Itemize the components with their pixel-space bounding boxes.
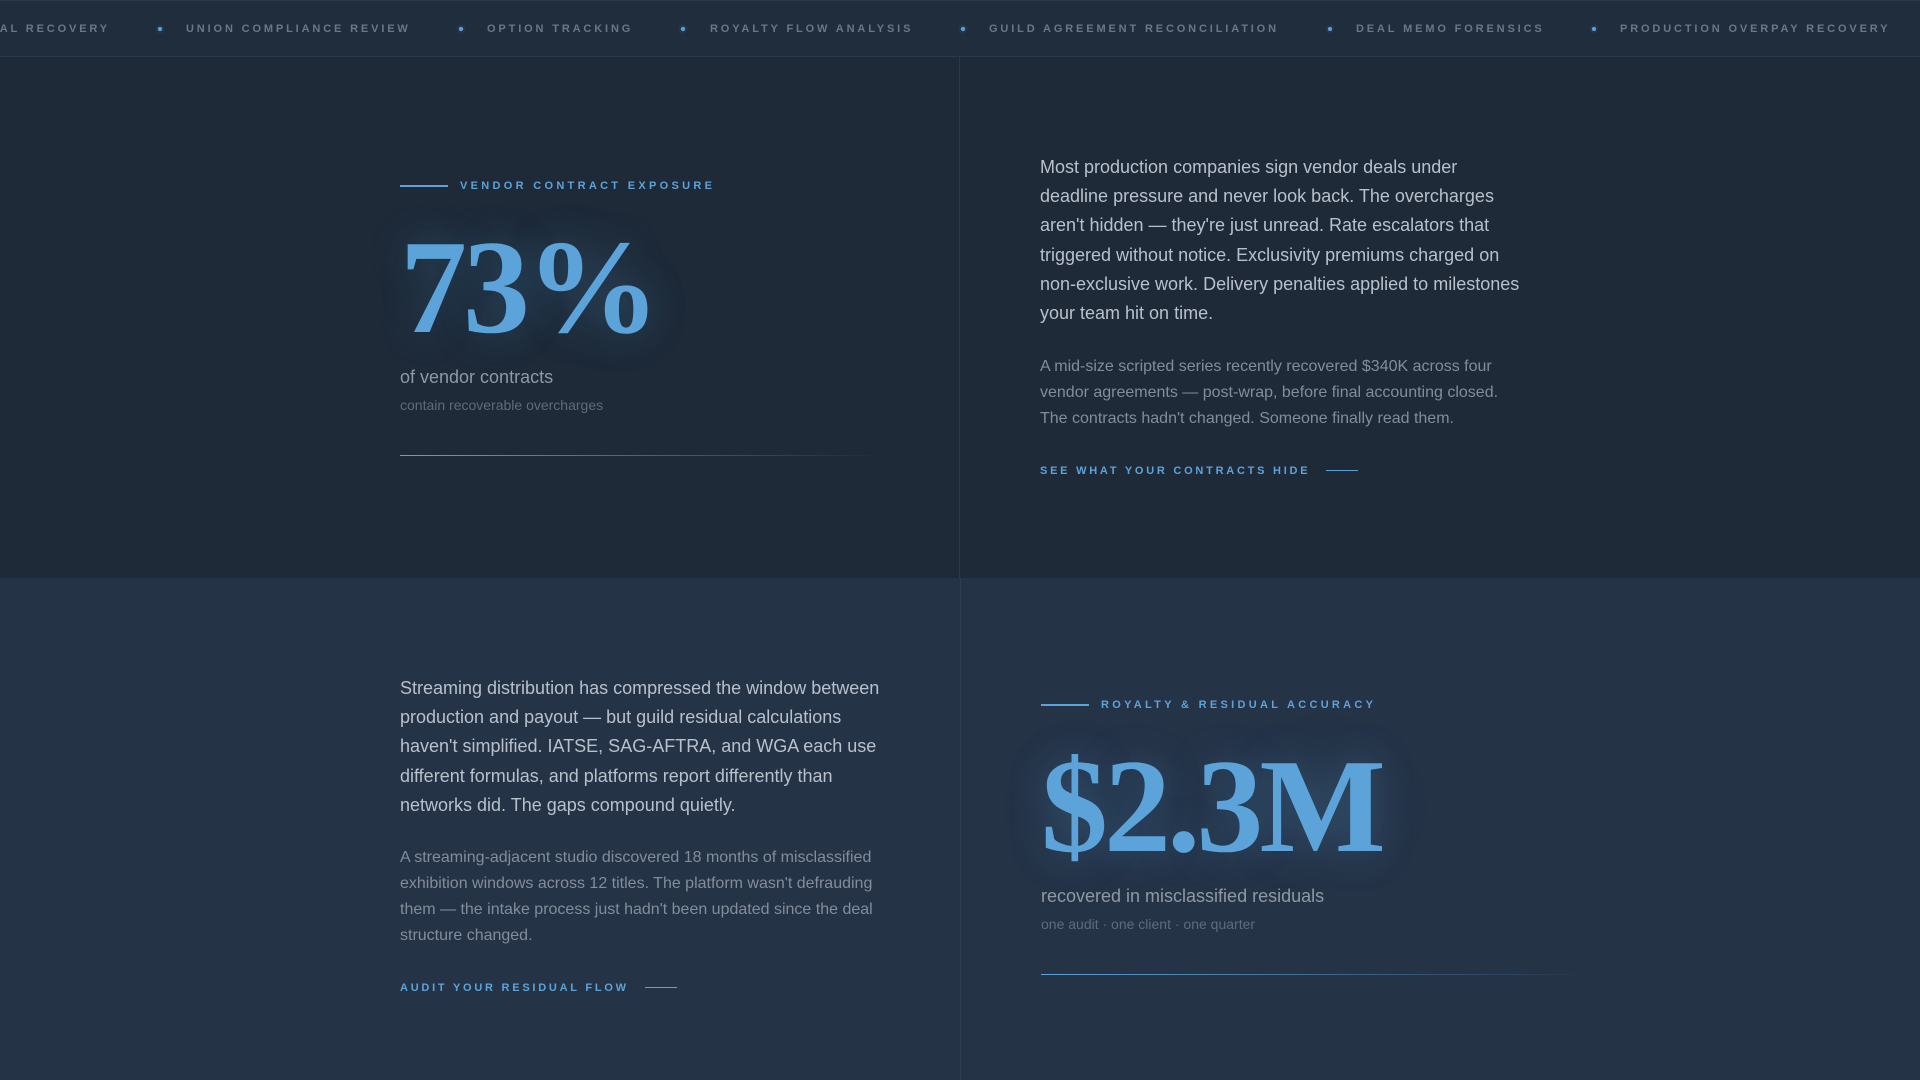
eyebrow rule: royalty <box>1041 704 1089 706</box>
big stat: 73%: 73% <box>400 213 656 361</box>
cta arrow line: contracts <box>1326 470 1358 471</box>
lead paragraph: vendor: triggered without notice. Exclusivity premiums charged on <box>1040 245 1499 265</box>
call to action: residual: AUDIT YOUR RESIDUAL FLOW <box>400 982 629 994</box>
ticker item: union compliance review: UNION COMPLIANCE REVIEW <box>186 23 411 35</box>
call to action: contracts: SEE WHAT YOUR CONTRACTS HIDE <box>1040 465 1310 477</box>
secondary paragraph: vendor <box>1040 358 1498 427</box>
lead paragraph: streaming: Streaming distribution has compressed the window between <box>400 678 879 698</box>
eyebrow: vendor contract exposure: VENDOR CONTRACT EXPOSURE <box>460 180 715 192</box>
panel: vendor contract exposure background <box>0 56 1920 578</box>
ticker dot 2 <box>459 27 463 31</box>
lead paragraph: vendor: non-exclusive work. Delivery penalties applied to milestones <box>1040 274 1519 294</box>
lead paragraph: vendor: your team hit on time. <box>1040 303 1213 323</box>
ticker dot 3 <box>681 27 685 31</box>
secondary paragraph: vendor: vendor agreements — post-wrap, before final accounting closed. <box>1040 384 1498 401</box>
fading rule <box>1041 974 1591 975</box>
ticker item: production overpay recovery: PRODUCTION OVERPAY RECOVERY <box>1620 23 1890 35</box>
lead paragraph: streaming <box>400 678 879 815</box>
ticker item: royalty flow analysis: ROYALTY FLOW ANALYSIS <box>710 23 913 35</box>
ticker item: deal memo forensics: DEAL MEMO FORENSICS <box>1356 23 1545 35</box>
stat label: of vendor contracts <box>400 367 553 387</box>
ticker dot 5 <box>1328 27 1332 31</box>
cta arrow line: residual <box>645 987 677 988</box>
lead paragraph: vendor: Most production companies sign vendor deals under <box>1040 157 1457 177</box>
lead paragraph: streaming: different formulas, and platforms report differently than <box>400 766 833 786</box>
lead paragraph: streaming: production and payout — but guild residual calculations <box>400 707 841 727</box>
lead paragraph: vendor: aren't hidden — they're just unread. Rate escalators that <box>1040 215 1489 235</box>
lead paragraph: vendor <box>1040 157 1519 323</box>
ticker dot 6 <box>1592 27 1596 31</box>
ticker dot 1 <box>158 27 162 31</box>
ticker item: option tracking: OPTION TRACKING <box>487 23 633 35</box>
secondary paragraph: streaming: A streaming-adjacent studio discovered 18 months of misclassified <box>400 849 871 866</box>
ticker strip <box>0 0 1920 57</box>
stat label: recovered in misclassified residuals <box>1041 886 1324 906</box>
secondary paragraph: streaming: exhibition windows across 12 titles. The platform wasn't defrauding <box>400 875 872 892</box>
panel: royalty and residual background <box>0 578 1920 1080</box>
secondary paragraph: streaming <box>400 849 873 944</box>
lead paragraph: streaming: haven't simplified. IATSE, SAG-AFTRA, and WGA each use <box>400 736 876 756</box>
lead paragraph: vendor: deadline pressure and never look back. The overcharges <box>1040 186 1494 206</box>
stat sub label: contain recoverable overcharges <box>400 397 603 413</box>
ticker dot 4 <box>961 27 965 31</box>
ticker item: guild agreement reconciliation: GUILD AGREEMENT RECONCILIATION <box>989 23 1279 35</box>
big stat: $2.3M: $2.3M <box>1041 732 1382 880</box>
secondary paragraph: vendor: A mid-size scripted series recently recovered $340K across four <box>1040 358 1492 375</box>
lead paragraph: streaming: networks did. The gaps compound quietly. <box>400 795 736 815</box>
secondary paragraph: streaming: them — the intake process just hadn't been updated since the deal <box>400 901 873 918</box>
secondary paragraph: vendor: The contracts hadn't changed. Someone finally read them. <box>1040 410 1454 427</box>
eyebrow: royalty and residual accuracy: ROYALTY & RESIDUAL ACCURACY <box>1101 699 1376 711</box>
fading rule <box>400 455 880 456</box>
eyebrow rule: vendor <box>400 185 448 187</box>
column divider bottom <box>960 578 961 1080</box>
secondary paragraph: streaming: structure changed. <box>400 927 533 944</box>
column divider top <box>959 57 960 578</box>
stat sub label: one audit · one client · one quarter <box>1041 916 1255 932</box>
